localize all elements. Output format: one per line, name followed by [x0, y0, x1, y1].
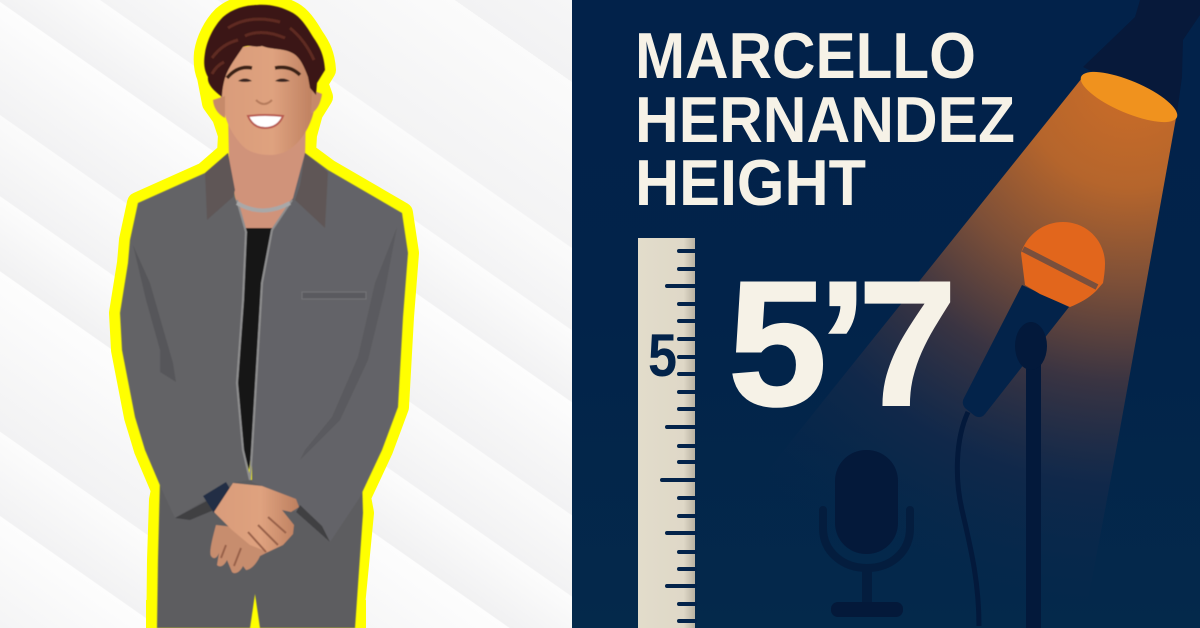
- person photo illustration: [120, 5, 408, 628]
- finger lines: [221, 517, 286, 566]
- jacket left side: [120, 153, 250, 518]
- hair curls: [212, 19, 314, 74]
- title: [635, 19, 1015, 219]
- cuff shadows: [175, 497, 330, 542]
- right navy panel: [572, 0, 1200, 628]
- left sleeve crease: [133, 245, 176, 382]
- ruler number: 5: [648, 322, 677, 389]
- lower hand fingers: [210, 525, 268, 573]
- left background with diagonal light streaks: [0, 0, 572, 628]
- height value: 5’7: [728, 244, 957, 443]
- black shirt: [237, 228, 272, 470]
- necklace: [237, 203, 290, 210]
- microphone clip: [1015, 322, 1047, 370]
- nose shadow: [256, 100, 272, 104]
- microphone handle: [963, 285, 1069, 417]
- upper hand: [214, 483, 299, 552]
- neck: [228, 110, 306, 232]
- right sleeve fold: [300, 227, 397, 460]
- handheld microphone: [963, 222, 1105, 417]
- face: [221, 46, 315, 155]
- ruler ticks: [662, 251, 695, 621]
- smile: [248, 115, 283, 128]
- collar: [205, 153, 328, 228]
- spotlight beam: [760, 78, 1176, 628]
- microphone cable: [957, 412, 979, 626]
- background microphone icon: [823, 450, 910, 617]
- chest pocket: [302, 292, 366, 299]
- zipper: [237, 200, 292, 480]
- eyebrows: [227, 67, 300, 78]
- watch: [203, 482, 235, 513]
- person: yellow cutout outline: [120, 5, 408, 628]
- microphone band: [1023, 249, 1097, 287]
- microphone head: [1021, 222, 1105, 307]
- spotlight lens: [1075, 62, 1183, 132]
- jacket right side: [252, 153, 408, 542]
- eyes: [238, 78, 290, 82]
- title: MARCELLO: [635, 19, 976, 92]
- title: HERNANDEZ: [635, 83, 1015, 156]
- ears: [213, 90, 322, 118]
- hair: [204, 5, 325, 97]
- spotlight lamp housing: [1083, 0, 1200, 113]
- trousers: [157, 480, 363, 628]
- microphone stand: [1026, 360, 1041, 628]
- ruler: [638, 238, 695, 628]
- title: HEIGHT: [635, 146, 866, 219]
